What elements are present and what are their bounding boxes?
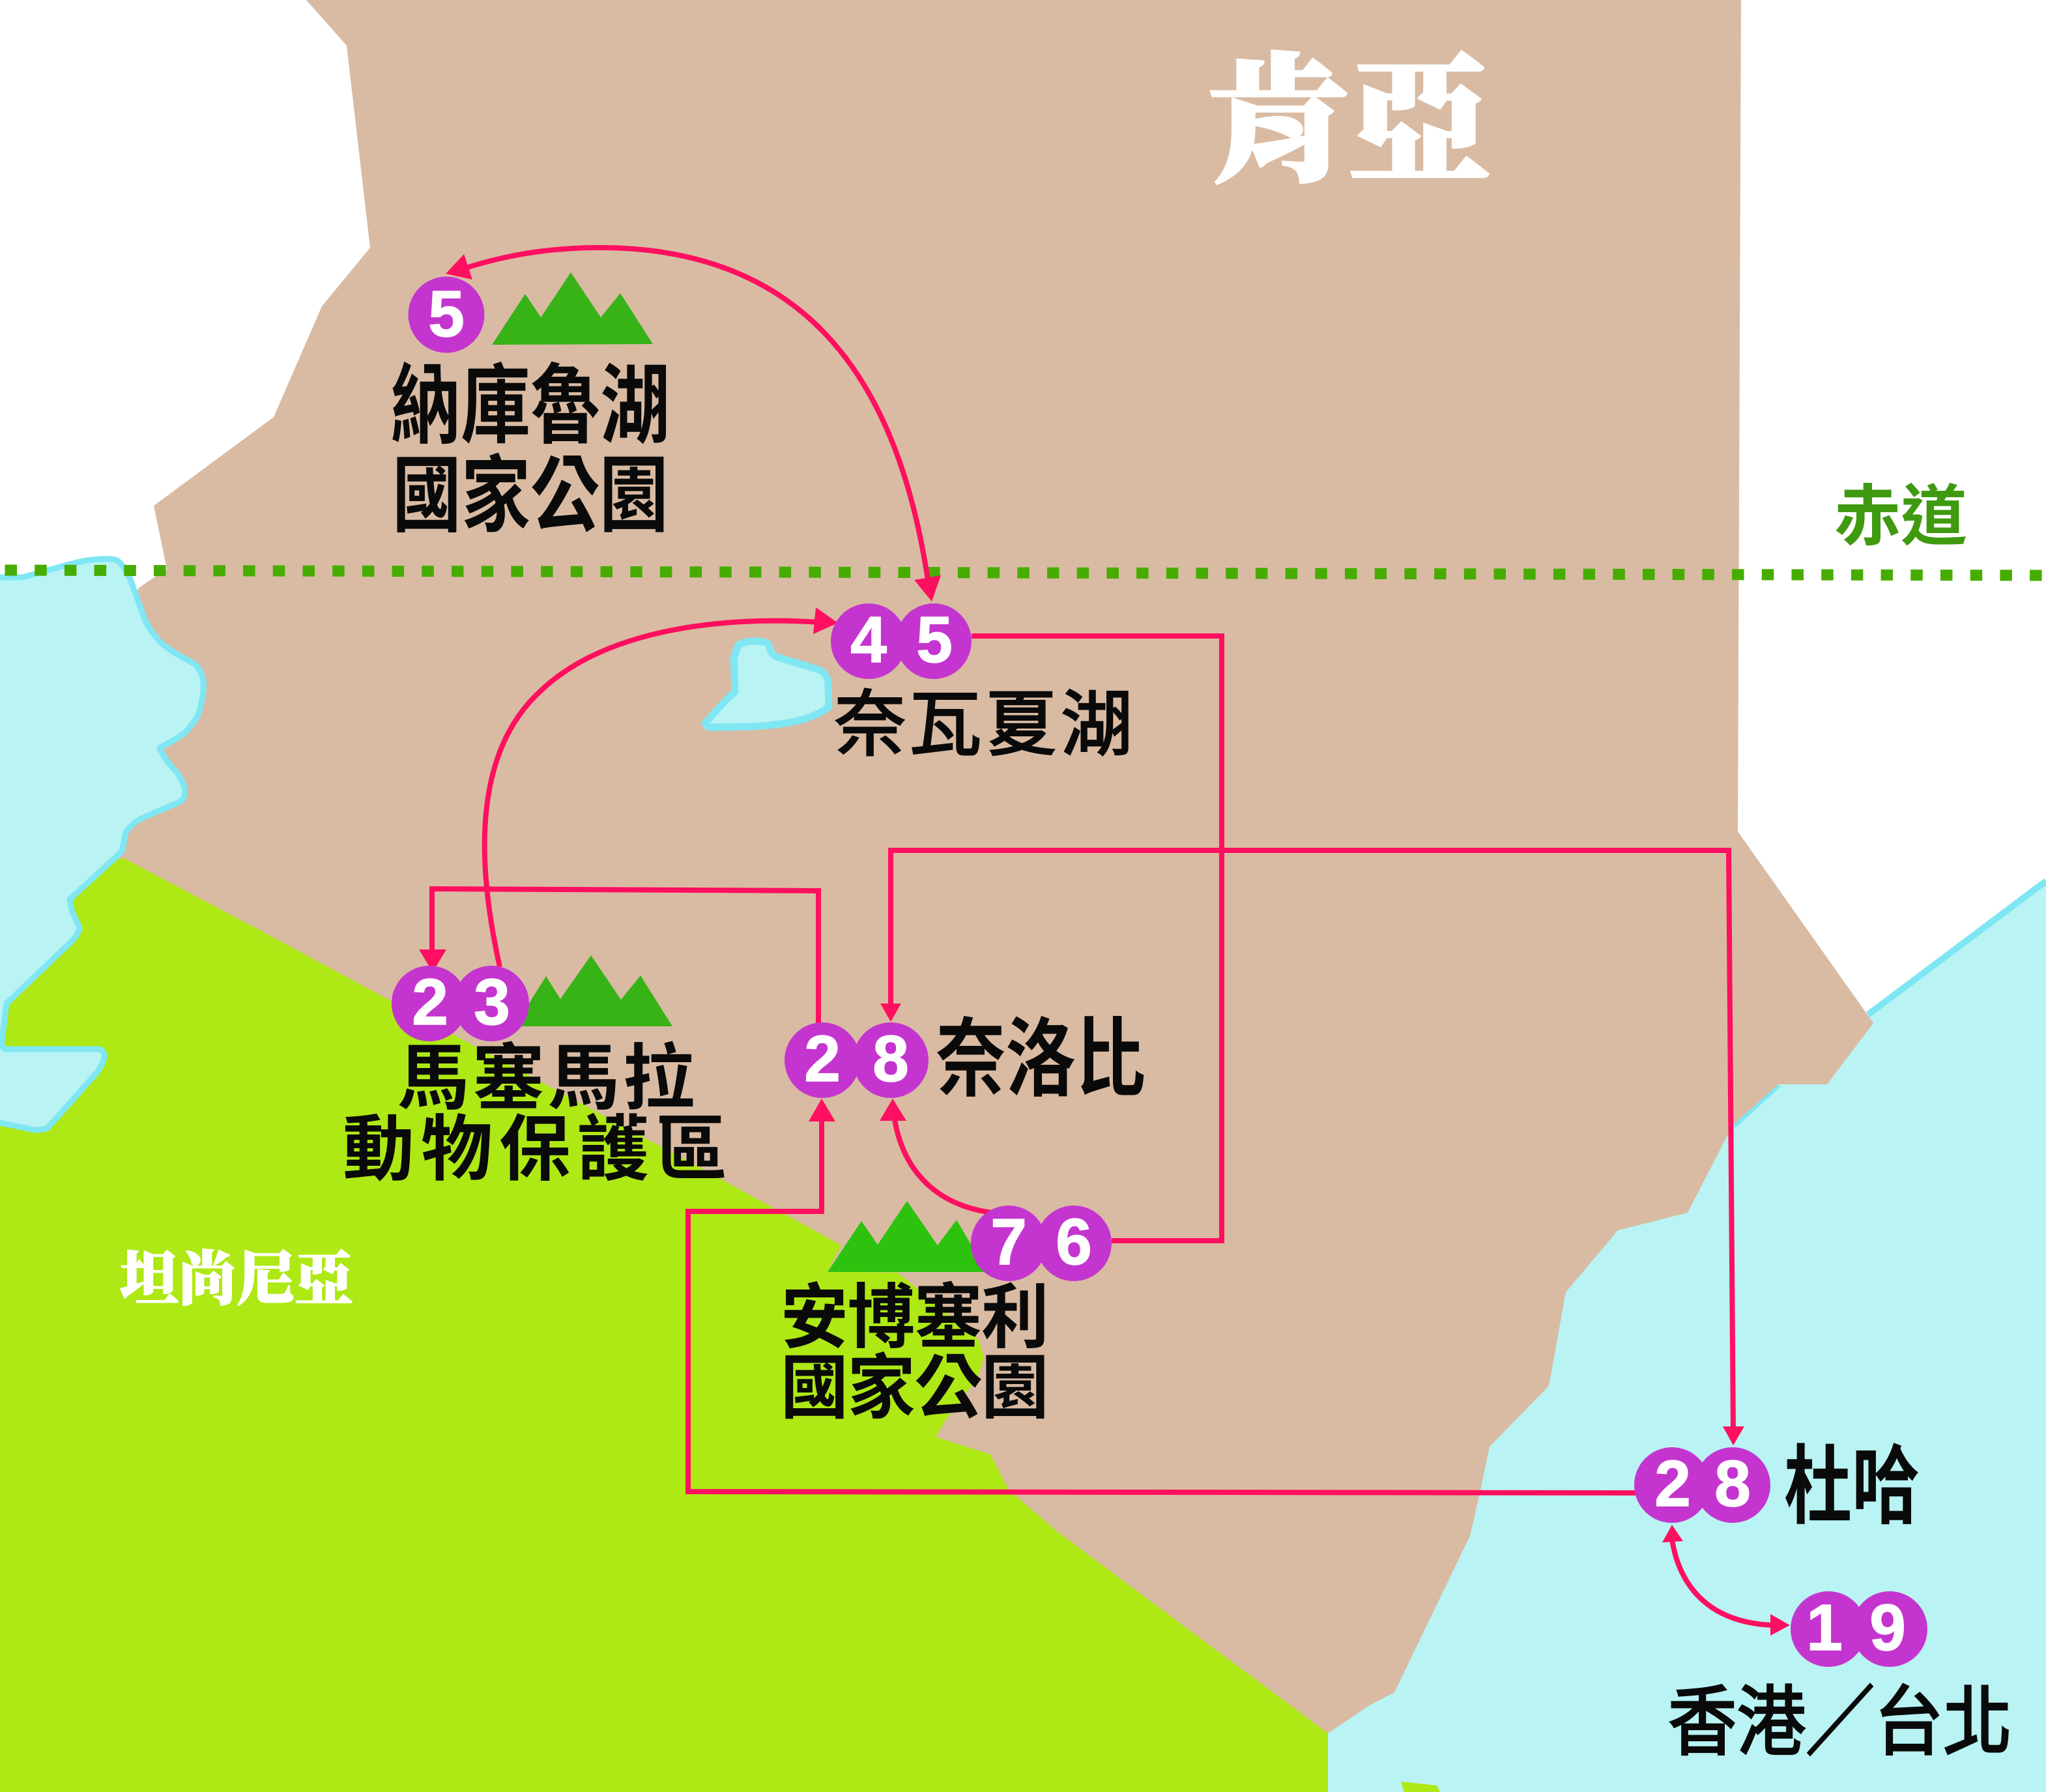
stop: Nairobi badges <box>785 1022 929 1098</box>
stop: Doha badges: 8 <box>1714 1447 1751 1520</box>
stop: Nakuru badge: 5 <box>428 278 465 351</box>
label: Masai Mara reserve: 動物保護區 <box>343 1110 727 1190</box>
region: Tanzania land <box>0 858 1328 1792</box>
stop: Naivasha badges: 5 <box>916 603 953 676</box>
label: Masai Mara reserve: 馬塞馬拉 <box>397 1039 695 1119</box>
label: Amboseli National Park <box>781 1279 1049 1427</box>
label: Nairobi: 奈洛比 <box>936 1011 1145 1107</box>
label: Lake Naivasha: 奈瓦夏湖 <box>834 685 1132 765</box>
route: Nairobi to Doha <box>880 850 1744 1445</box>
stop: Doha badges: 2 <box>1654 1447 1691 1520</box>
stop: Naivasha badges <box>831 603 972 679</box>
icon: mountains at Masai Mara <box>515 955 672 1026</box>
route: Doha to Nairobi <box>688 1099 1635 1493</box>
stop: Doha badges <box>1634 1447 1770 1523</box>
label: Amboseli National Park: 安博塞利 <box>781 1279 1049 1357</box>
route: Nakuru to Naivasha curve <box>446 248 941 601</box>
stop: Nairobi badges: 8 <box>872 1022 909 1095</box>
label: equator: 赤道 <box>1834 480 1967 554</box>
region: small island <box>1401 1782 1440 1792</box>
stop: Amboseli badges: 6 <box>1056 1206 1092 1279</box>
icon: mountains at Nakuru <box>492 272 653 345</box>
label: Lake Nakuru National Park: 納庫魯湖 <box>391 357 670 455</box>
title: Kenya: 肯亞 <box>1207 46 1491 199</box>
region: eastern sea <box>1238 881 2046 1792</box>
icon: mountains at Amboseli <box>828 1201 987 1272</box>
stop: Masai Mara badges: 3 <box>474 966 510 1039</box>
route: Masai Mara to Naivasha curve <box>485 607 838 967</box>
route: Doha to Hong Kong and Taipei curve <box>1662 1525 1790 1636</box>
label: Tanzania: 坦尚尼亞 <box>120 1248 353 1312</box>
stop: Hong Kong and Taipei badges <box>1791 1591 1927 1667</box>
label: Hong Kong / Taipei: 香港／台北 <box>1668 1679 2012 1765</box>
lake: Naivasha <box>705 641 829 727</box>
stop: Hong Kong and Taipei badges: 9 <box>1869 1591 1906 1664</box>
route: Naivasha to Amboseli <box>972 636 1222 1241</box>
label: Masai Mara reserve <box>343 1039 727 1190</box>
stop: Amboseli badges <box>971 1206 1112 1281</box>
equator dotted line <box>5 570 2046 575</box>
label: Lake Nakuru National Park <box>391 357 670 543</box>
stop: Naivasha badges: 4 <box>850 603 887 676</box>
region: western lake <box>0 559 203 1130</box>
stop: Amboseli badges: 7 <box>990 1206 1027 1279</box>
label: Amboseli National Park: 國家公園 <box>781 1349 1049 1427</box>
stop: Hong Kong and Taipei badges: 1 <box>1806 1591 1843 1664</box>
stop: Masai Mara badges: 2 <box>412 966 448 1039</box>
route: Nairobi to Masai Mara <box>419 889 818 1023</box>
stop: Nakuru badge <box>408 276 485 353</box>
label: Doha: 杜哈 <box>1784 1439 1920 1535</box>
stop: Nairobi badges: 2 <box>804 1022 841 1095</box>
stop: Masai Mara badges <box>392 966 529 1041</box>
label: Lake Nakuru National Park: 國家公園 <box>392 450 669 543</box>
route: Amboseli to Nairobi curve <box>880 1099 992 1213</box>
